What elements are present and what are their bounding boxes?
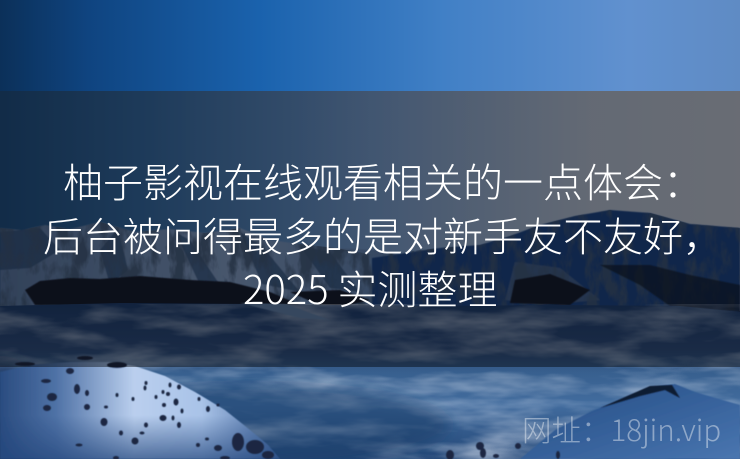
sky [0,0,740,311]
left foreground snow hill [0,362,280,459]
sea of clouds [0,303,740,459]
title [43,151,723,316]
title line 1: 柚子影视在线观看相关的一点体会： [63,151,703,209]
watermark: 网址：18jin.vip [522,408,721,450]
scattered trees [15,356,560,459]
title line 2: 后台被问得最多的是对新手友不友好， [43,205,723,263]
left mountain range [0,222,470,330]
dark rocks at mountain base [25,265,740,312]
snowy outcrop at mountain foot [240,303,330,320]
rock texture [0,205,740,310]
right hill ridge [600,385,680,408]
right foreground hill [520,384,740,459]
title line 3: 2025 实测整理 [243,258,497,316]
right mountain range [372,210,740,330]
dark translucent band [0,91,740,367]
